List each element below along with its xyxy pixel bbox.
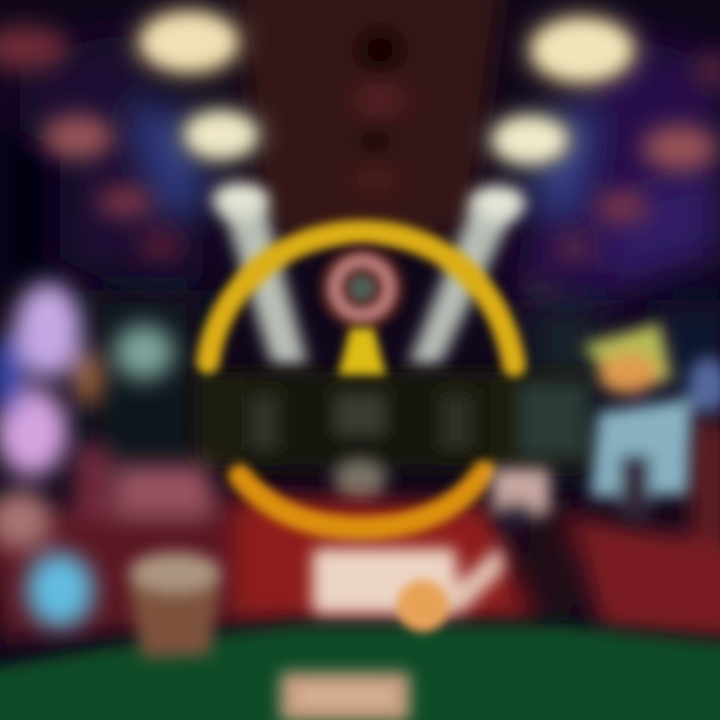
left neon lights <box>0 282 174 628</box>
green floor <box>0 625 720 720</box>
orange chip <box>397 580 449 632</box>
popcorn bucket <box>128 552 222 658</box>
lower wall <box>90 290 720 470</box>
ceiling: maroon centre <box>235 0 505 240</box>
ceiling: pink side lamps <box>0 26 720 302</box>
ceiling lights <box>143 15 630 221</box>
light beams <box>222 195 520 365</box>
central panel <box>195 372 590 502</box>
red seats <box>0 420 720 640</box>
ceiling light halos <box>133 6 640 168</box>
ceiling: purple and blue sides <box>0 30 720 320</box>
right character <box>582 322 720 520</box>
central medallion <box>320 246 404 330</box>
gold ring upper arc <box>208 232 514 365</box>
gold ring lower arc <box>240 472 484 528</box>
cream table boxes <box>312 468 550 615</box>
yellow trophy <box>338 328 386 375</box>
bottom card box <box>280 672 410 720</box>
